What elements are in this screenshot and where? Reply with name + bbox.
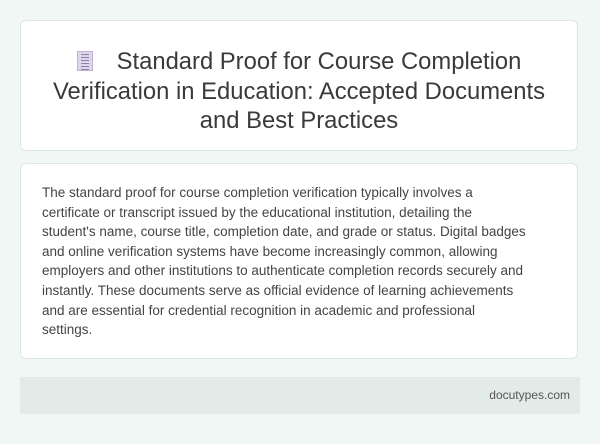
description text: settings. bbox=[42, 322, 92, 337]
title: and Best Practices bbox=[200, 107, 398, 134]
description text bbox=[42, 185, 526, 337]
description text: and online verification systems have become increasingly common, allowing bbox=[42, 244, 497, 259]
title: Standard Proof for Course Completion bbox=[117, 48, 521, 75]
description text: instantly. These documents serve as official evidence of learning achievements bbox=[42, 283, 513, 298]
title: Verification in Education: Accepted Documents bbox=[53, 78, 545, 104]
title bbox=[53, 48, 545, 134]
description text: student's name, course title, completion date, and grade or status. Digital badges bbox=[42, 224, 526, 239]
description text: certificate or transcript issued by the educational institution, detailing the bbox=[42, 205, 472, 220]
description panel bbox=[20, 163, 578, 359]
footer source: docutypes.com bbox=[489, 388, 570, 402]
title card bbox=[20, 20, 578, 151]
description text: and are essential for credential recognition in academic and professional bbox=[42, 303, 475, 318]
description text: employers and other institutions to authenticate completion records securely and bbox=[42, 263, 523, 278]
icon: document bbox=[77, 51, 93, 71]
description text: The standard proof for course completion verification typically involves a bbox=[42, 185, 473, 200]
footer bar bbox=[20, 377, 580, 414]
